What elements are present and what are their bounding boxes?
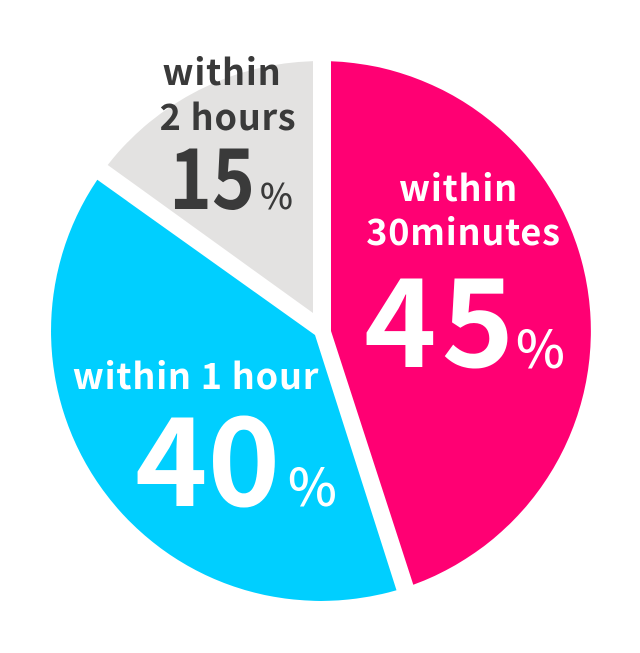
label: within 30minutes: within (399, 160, 518, 212)
slice: within 30 minutes 45% (331, 61, 591, 585)
value: 45%: % (516, 308, 565, 383)
value: 45%: 45 (364, 225, 519, 403)
value: 15%: 15 (169, 113, 255, 234)
value: 40%: % (288, 446, 337, 521)
value: 40%: 40 (135, 364, 280, 542)
label: within 1 hour: within 1 hour (73, 348, 319, 400)
label: within 30minutes: 30minutes (366, 204, 561, 256)
label: within 2 hours: 2 hours (160, 89, 296, 141)
label: within 2 hours (160, 44, 296, 141)
label: within 2 hours: within (162, 44, 282, 96)
slice: within 1 hour 40% (51, 180, 397, 601)
slice: within 2 hours 15% (108, 44, 313, 313)
label: within 30minutes (366, 160, 561, 256)
value: 15%: % (260, 169, 293, 220)
